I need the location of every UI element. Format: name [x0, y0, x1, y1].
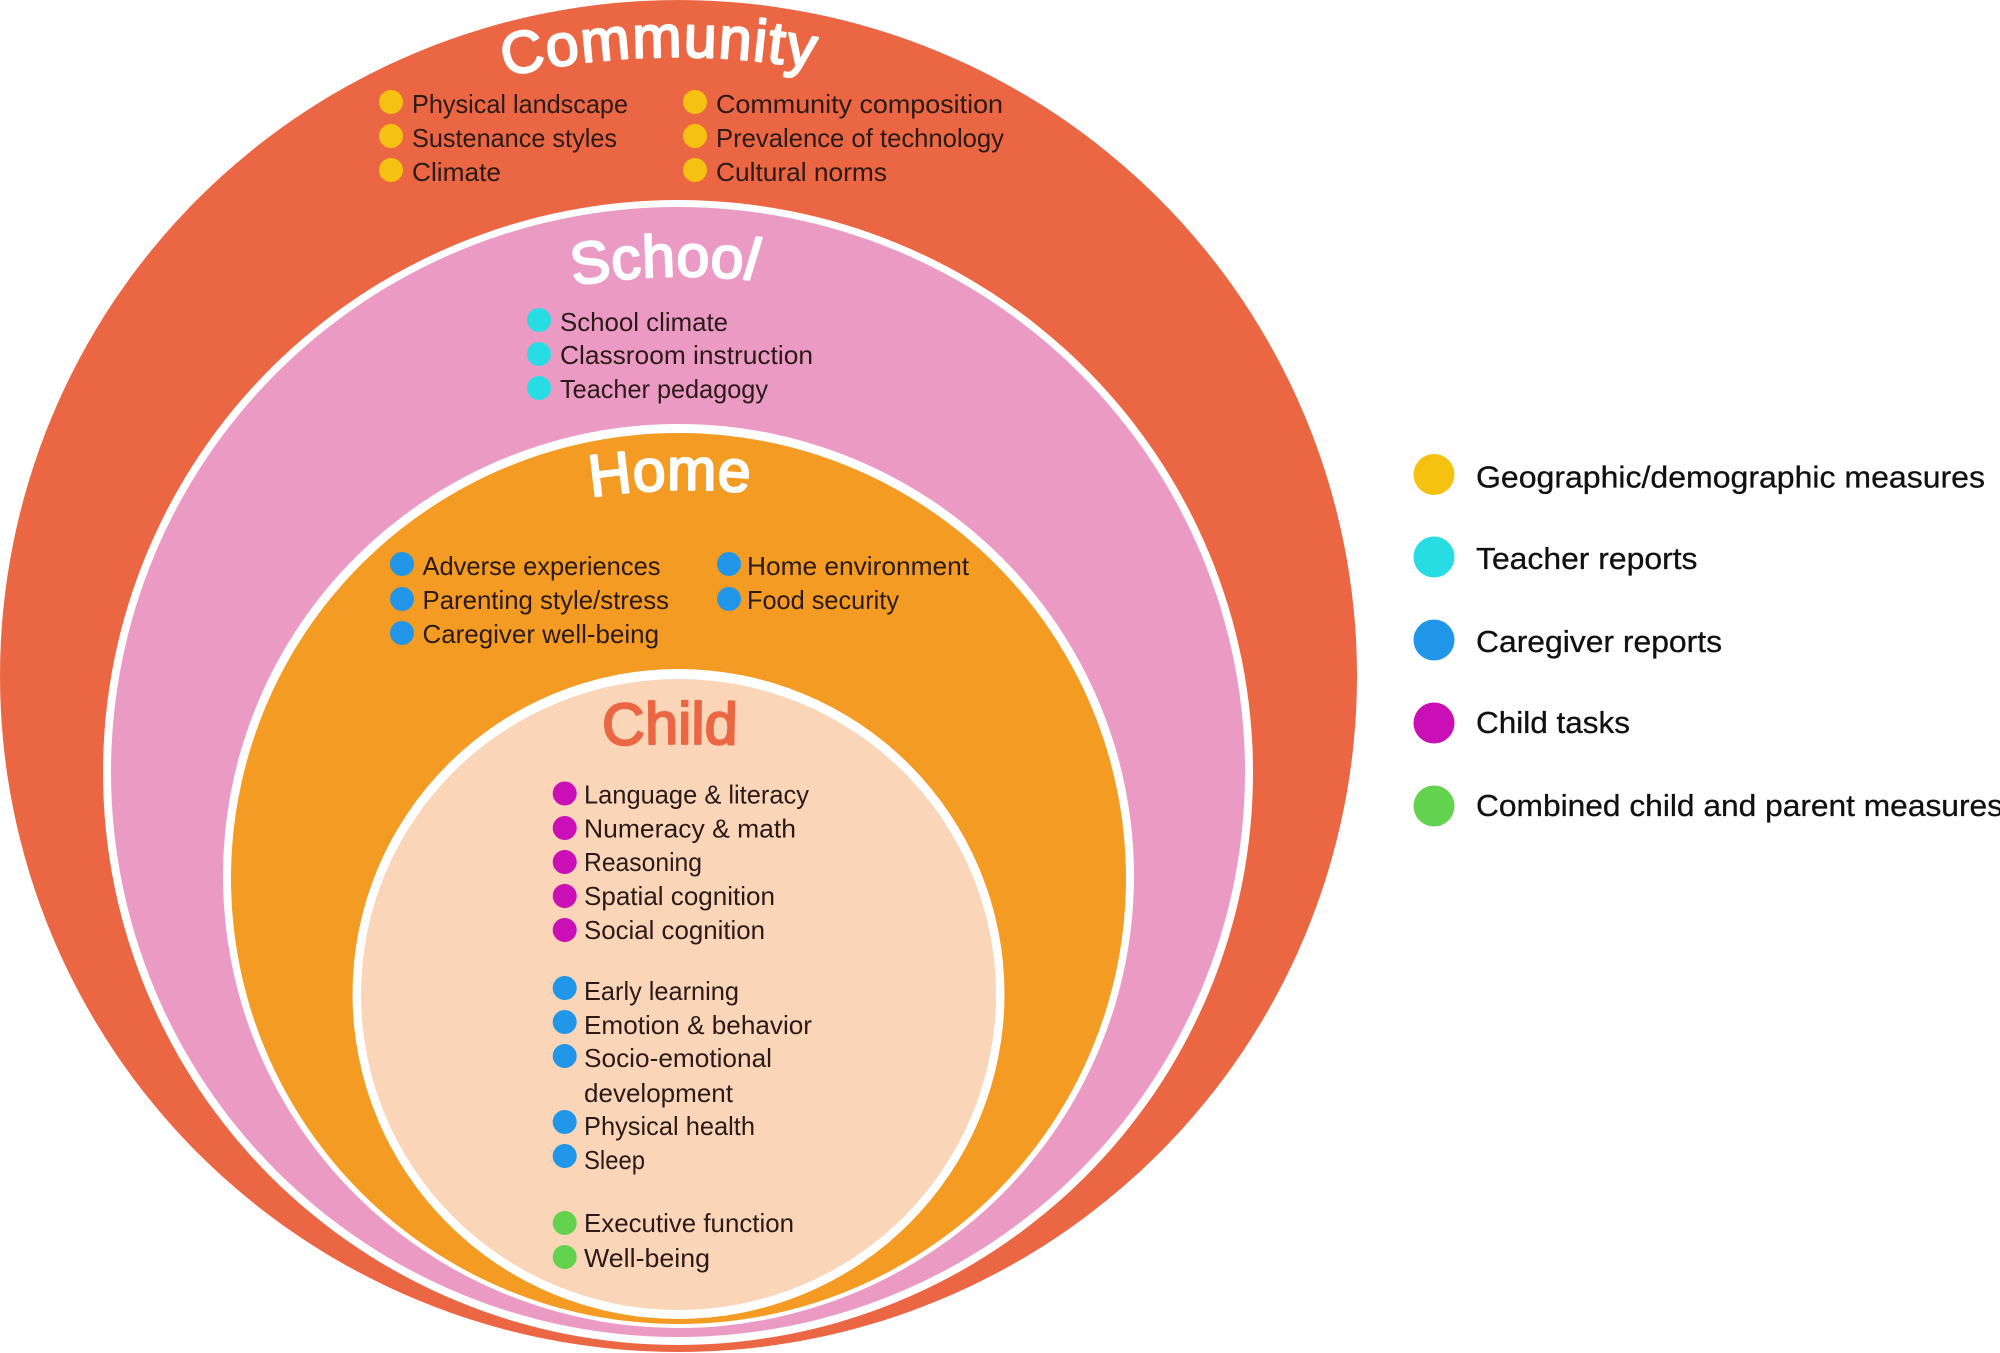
item: Sustenance styles: Sustenance styles	[412, 123, 617, 153]
item: Prevalence of technology: Prevalence of technology	[716, 123, 1004, 153]
item: Socio-emotional development: Socio-emotional	[584, 1043, 772, 1073]
item: Teacher pedagogy: Teacher pedagogy	[560, 374, 768, 404]
legend	[1414, 454, 2000, 826]
item: Social cognition: Social cognition	[584, 915, 765, 945]
heading: School: School	[572, 233, 763, 284]
school circle	[111, 207, 1245, 1337]
legend: Teacher reports: Teacher reports	[1476, 541, 1698, 576]
item: Sleep: Sleep	[584, 1145, 645, 1175]
legend: Child tasks	[1414, 702, 1630, 744]
legend: Child tasks: Child tasks	[1476, 705, 1630, 740]
heading: Child: Child	[604, 700, 736, 746]
item: Well-being: Well-being	[584, 1243, 710, 1273]
community circle	[0, 0, 1357, 1352]
heading: Community: Community	[502, 17, 820, 78]
item: Cultural norms: Cultural norms	[716, 157, 887, 187]
item: School climate: School climate	[560, 307, 728, 337]
heading: Home: Home	[590, 450, 749, 498]
item: Physical landscape: Physical landscape	[412, 89, 628, 119]
item: Physical health: Physical health	[584, 1111, 755, 1141]
panel: community	[0, 0, 1357, 1352]
item: Spatial cognition: Spatial cognition	[584, 881, 775, 911]
legend: Geographic/demographic measures: Geographic/demographic measures	[1476, 460, 1985, 494]
home circle outline	[223, 424, 1134, 1328]
item: Food security: Food security	[747, 585, 899, 615]
school circle outline	[103, 200, 1253, 1345]
item: Home environment: Home environment	[747, 551, 970, 581]
child circle	[361, 679, 996, 1310]
item: Adverse experiences: Adverse experiences	[422, 551, 660, 581]
item: Climate: Climate	[412, 157, 501, 187]
panel: school	[103, 200, 1253, 1345]
legend: Caregiver reports	[1414, 620, 1722, 660]
panel: home	[223, 424, 1134, 1328]
item: Parenting style/stress: Parenting style/stress	[422, 585, 669, 615]
item: Early learning: Early learning	[584, 976, 739, 1006]
legend: Teacher reports	[1414, 536, 1698, 578]
legend: Caregiver reports: Caregiver reports	[1476, 624, 1722, 659]
item: Numeracy & math: Numeracy & math	[584, 814, 796, 844]
item: Emotion & behavior: Emotion & behavior	[584, 1010, 812, 1040]
item: Sleep	[553, 1144, 645, 1175]
item: Caregiver well-being: Caregiver well-being	[422, 619, 659, 649]
item: Executive function: Executive function	[584, 1208, 794, 1238]
item: Language & literacy: Language & literacy	[584, 780, 809, 810]
item: Community composition: Community composition	[716, 89, 1003, 119]
item: Classroom instruction: Classroom instruction	[560, 340, 813, 370]
item: Reasoning: Reasoning	[584, 847, 702, 877]
item: Socio-emotional development: development	[584, 1078, 734, 1108]
item: Socio-emotional development	[553, 1043, 772, 1108]
legend: Combined child and parent measures: Combined child and parent measures	[1476, 788, 2000, 823]
child circle outline	[352, 669, 1004, 1319]
home circle	[231, 433, 1126, 1324]
panel: child	[352, 669, 1004, 1319]
